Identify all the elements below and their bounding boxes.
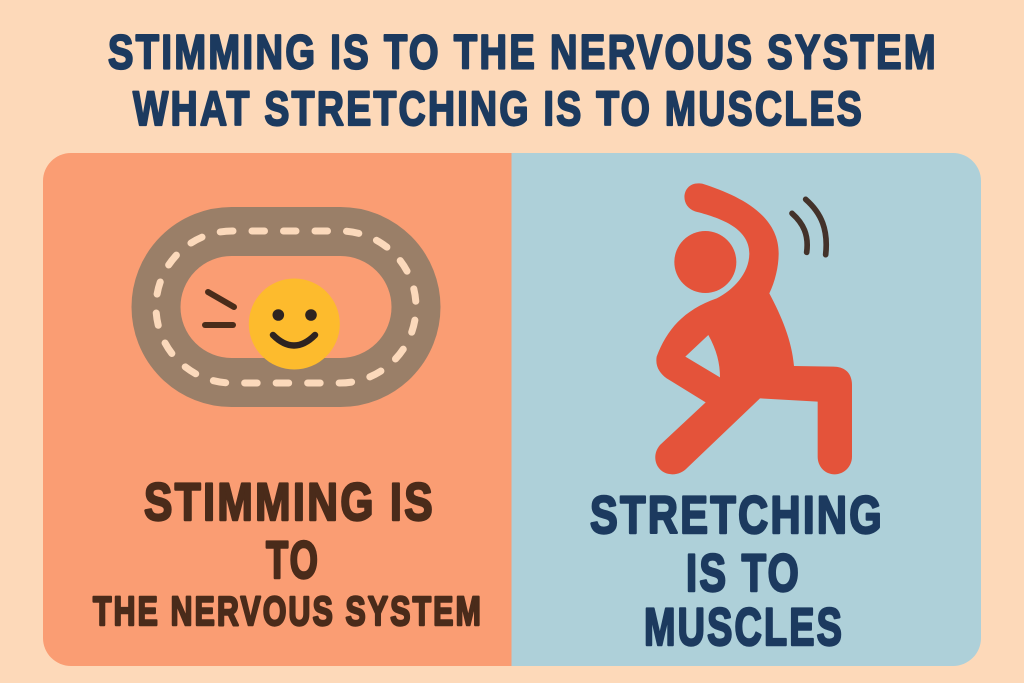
caption: stretching xyxy=(590,486,884,657)
motion arcs xyxy=(792,199,826,255)
title xyxy=(108,26,938,136)
caption: stimming xyxy=(93,473,483,634)
caption: stretching: STRETCHING xyxy=(590,486,884,545)
track xyxy=(156,231,416,383)
figure body xyxy=(655,183,852,474)
icon: smiley face xyxy=(249,278,340,370)
caption: stimming: THE NERVOUS SYSTEM xyxy=(93,588,483,634)
panel: stretching xyxy=(512,153,981,666)
caption: stretching: IS TO xyxy=(686,544,801,603)
figure head xyxy=(674,231,736,293)
caption: stimming: TO xyxy=(266,531,320,590)
panel: stimming xyxy=(43,153,512,666)
motion lines xyxy=(205,292,234,325)
caption: stimming: STIMMING IS xyxy=(144,473,435,532)
icon: oval track with smiley xyxy=(156,231,416,383)
icon: stretching figure xyxy=(655,183,852,474)
caption: stretching: MUSCLES xyxy=(644,598,844,657)
